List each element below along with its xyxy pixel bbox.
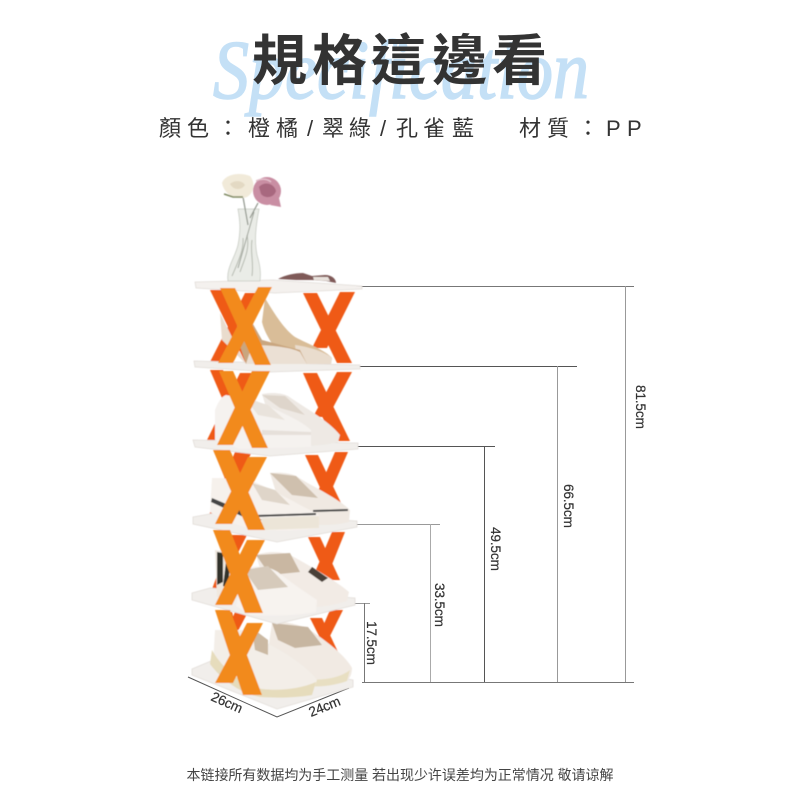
rack: shelf 4 (192, 588, 355, 624)
rack: front X frames (213, 287, 272, 695)
shoes: top tier high heels (220, 292, 332, 364)
footer note: 本链接所有数据均为手工测量 若出现少许误差均为正常情况 敬请谅解 (186, 767, 614, 783)
rack: top shelf (195, 280, 362, 293)
label: 49.5cm: 49.5cm (488, 527, 503, 571)
flower stems (243, 197, 258, 225)
shoes: second tier pair (215, 393, 340, 449)
shoes: fourth tier pair (215, 550, 349, 616)
flower: cream rose (222, 174, 253, 198)
label: 17.5cm: 17.5cm (364, 621, 379, 665)
label: 24cm: 24cm (307, 694, 342, 720)
rack: shelf 3 (193, 513, 357, 542)
background script: Specification: Specification (213, 24, 589, 117)
label: 81.5cm: 81.5cm (633, 385, 648, 429)
rack: shelf 5 bottom (192, 658, 353, 709)
rack: shelf 2 (193, 440, 358, 456)
shoes: bottom pair (210, 622, 352, 698)
shoes: third tier pair (210, 473, 350, 531)
dimension lines (188, 286, 634, 717)
title: 規格這邊看 (252, 30, 547, 92)
flower: pink rose (253, 177, 281, 207)
label: 26cm: 26cm (209, 689, 245, 716)
slipper on top shelf (278, 273, 336, 283)
rack: shelf 1 (194, 361, 360, 372)
subtitle: colours and material: 顏色：橙橘/翠綠/孔雀藍材質：PP (159, 116, 642, 141)
label: 33.5cm: 33.5cm (432, 583, 447, 627)
shoe rack illustration (192, 174, 362, 709)
vase (228, 209, 260, 281)
label: 66.5cm: 66.5cm (561, 484, 576, 528)
rack: back X frames (207, 290, 355, 680)
